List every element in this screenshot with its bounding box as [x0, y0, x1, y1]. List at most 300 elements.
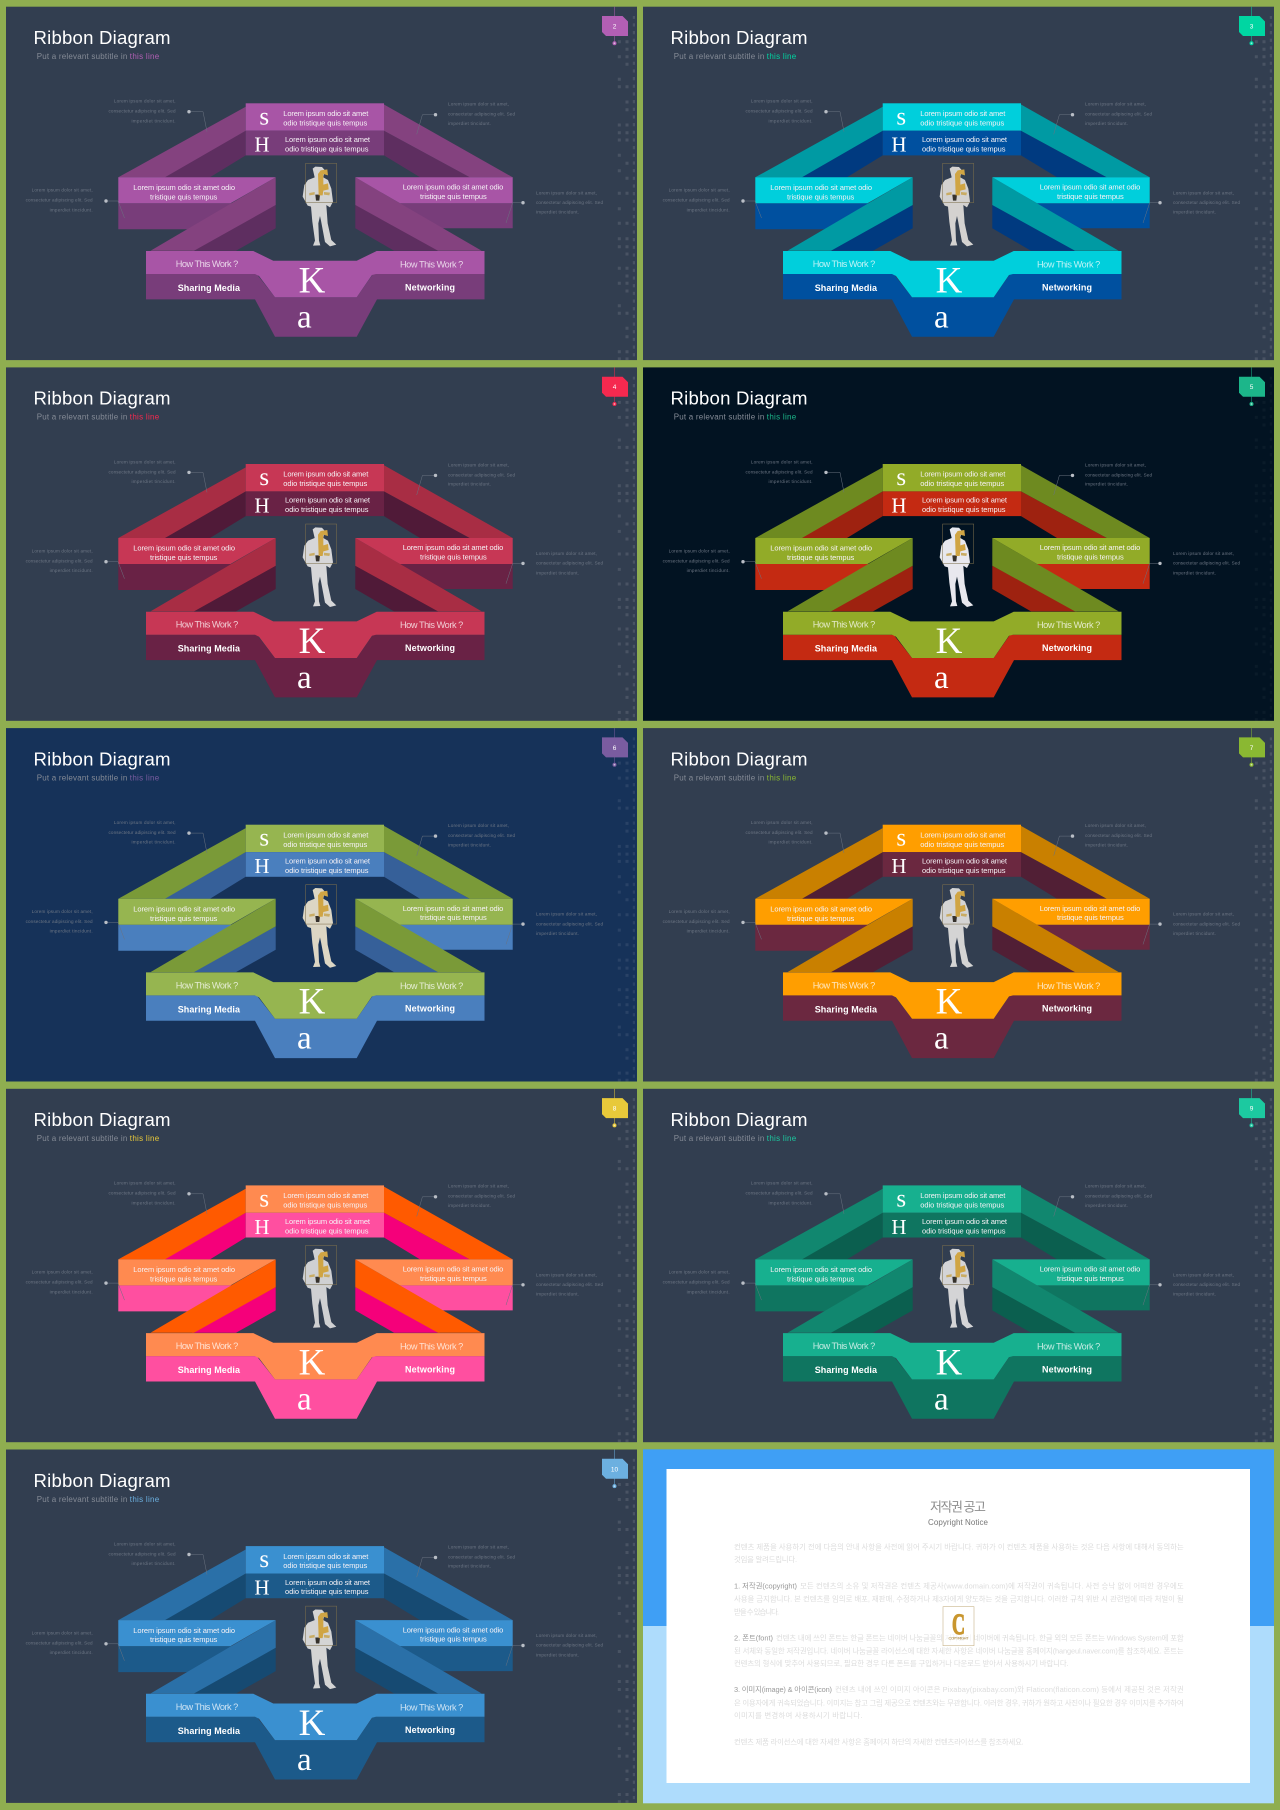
- text: right block: tristique quis tempus: [420, 553, 487, 562]
- presenter figure icon: [303, 885, 337, 968]
- note: top right: [1085, 823, 1152, 847]
- text: left block: Lorem ipsum odio sit amet odio: [770, 183, 872, 192]
- note: middle left: consectetur adipiscing elit. Sed: [663, 1280, 730, 1285]
- note: top left: Lorem ipsum dolor sit amet,: [114, 1181, 176, 1186]
- text: top band: odio tristique quis tempus: [920, 1200, 1005, 1209]
- text: second band: [285, 496, 371, 514]
- paragraph: font: [734, 1634, 1184, 1668]
- subtitle: Put a relevant subtitle in: [37, 52, 127, 61]
- text: left block: tristique quis tempus: [787, 1274, 855, 1283]
- note: middle left: consectetur adipiscing elit. Sed: [663, 919, 730, 924]
- letter a: a: [297, 1381, 312, 1417]
- text: left block: [770, 183, 872, 201]
- presenter figure icon: [303, 163, 337, 246]
- text: right block: [403, 1625, 503, 1644]
- note: middle right: imperdiet tincidunt.: [1173, 931, 1216, 936]
- note: top right: Lorem ipsum dolor sit amet,: [448, 1184, 509, 1189]
- letter K: K: [299, 1342, 326, 1383]
- heading: Ribbon Diagram: [34, 1470, 170, 1491]
- note: top left: imperdiet tincidunt.: [132, 479, 176, 484]
- paragraph: image and icon: 컨텐츠 내에 쓰인 이미지 아이콘은 Pixabay(pixabay.com)와 Flaticon(flaticon.com) 등에서 제공된 것은 저작권: [835, 1685, 1184, 1694]
- text: top band: odio tristique quis tempus: [283, 1561, 368, 1570]
- text: left block: tristique quis tempus: [787, 192, 855, 201]
- note: middle left: consectetur adipiscing elit. Sed: [26, 919, 93, 924]
- note: top right: consectetur adipiscing elit. Sed: [448, 1194, 515, 1199]
- heading: Ribbon Diagram: [670, 748, 808, 769]
- subtitle: this line: [767, 1134, 797, 1143]
- note: middle left: imperdiet tincidunt.: [687, 1289, 730, 1294]
- label: sharing media: Sharing Media: [815, 1365, 878, 1375]
- text: top band: Lorem ipsum odio sit amet: [283, 1552, 369, 1561]
- note: middle right: [1173, 190, 1240, 215]
- note: top left: imperdiet tincidunt.: [132, 118, 176, 123]
- note: top right: imperdiet tincidunt.: [448, 1564, 491, 1569]
- label: how right: How This Work ?: [400, 1702, 463, 1712]
- note: middle right: Lorem ipsum dolor sit amet,: [536, 551, 597, 556]
- text: right block: tristique quis tempus: [1057, 553, 1124, 562]
- label: how right: How This Work ?: [1037, 260, 1100, 270]
- text: top band: Lorem ipsum odio sit amet: [920, 470, 1006, 479]
- letter K: K: [936, 260, 963, 301]
- text: left block: Lorem ipsum odio sit amet odio: [770, 904, 872, 913]
- slide background: [6, 1089, 637, 1442]
- text: top band: Lorem ipsum odio sit amet: [920, 830, 1006, 839]
- heading: Ribbon Diagram: [670, 1109, 808, 1130]
- note: middle right: imperdiet tincidunt.: [536, 570, 579, 575]
- subtitle: Put a relevant subtitle in: [37, 1134, 127, 1143]
- note: middle left: imperdiet tincidunt.: [687, 929, 730, 934]
- note: middle right: [1173, 551, 1240, 575]
- note: top right: imperdiet tincidunt.: [1085, 1203, 1128, 1208]
- subtitle: Put a relevant subtitle in: [674, 1134, 764, 1143]
- note: top right: Lorem ipsum dolor sit amet,: [1085, 823, 1146, 828]
- text: right block: tristique quis tempus: [420, 1635, 487, 1644]
- label: sharing media: Sharing Media: [178, 1004, 241, 1014]
- note: middle left: Lorem ipsum dolor sit amet,: [32, 188, 93, 193]
- label: how left: How This Work ?: [813, 1341, 875, 1351]
- note: middle right: Lorem ipsum dolor sit amet,: [1173, 912, 1234, 917]
- page number badge: [602, 1089, 628, 1127]
- note: top right: [1085, 1184, 1152, 1208]
- page number badge: [1239, 367, 1265, 406]
- page number badge: [1239, 728, 1265, 767]
- subtitle: Put a relevant subtitle in: [37, 1495, 127, 1504]
- text: top band: [283, 830, 369, 849]
- panel: copyright notice: [643, 1449, 1274, 1803]
- text: right block: tristique quis tempus: [420, 192, 487, 201]
- letter s: s: [259, 825, 269, 852]
- text: top band: [920, 109, 1006, 127]
- page number badge: 6: [613, 745, 617, 752]
- page number badge: 10: [611, 1466, 618, 1473]
- note: middle left: [26, 1270, 93, 1294]
- letter s: s: [259, 1546, 269, 1573]
- paragraph: copyright: 받을 수 있습니다.: [734, 1608, 779, 1616]
- note: middle right: imperdiet tincidunt.: [1173, 570, 1216, 575]
- leader lines: [104, 110, 525, 223]
- note: top right: imperdiet tincidunt.: [448, 121, 491, 126]
- text: left block: [133, 904, 235, 923]
- text: right block: Lorem ipsum odio sit amet odio: [403, 904, 503, 913]
- leader lines: [741, 831, 1162, 944]
- ribbon diagram: [118, 825, 513, 1058]
- page number badge: [602, 728, 628, 767]
- note: top right: [448, 823, 515, 847]
- note: middle right: Lorem ipsum dolor sit amet,: [536, 1633, 597, 1638]
- text: second band: Lorem ipsum odio sit amet: [922, 1217, 1008, 1226]
- ribbon diagram: [118, 1546, 513, 1780]
- page number badge: 2: [613, 24, 617, 30]
- note: top left: [746, 820, 813, 845]
- note: top left: imperdiet tincidunt.: [768, 840, 812, 845]
- note: middle left: imperdiet tincidunt.: [687, 207, 730, 212]
- page number badge: 3: [1250, 24, 1254, 30]
- heading: Ribbon Diagram: [34, 388, 170, 409]
- note: middle left: [663, 1270, 730, 1294]
- note: top left: consectetur adipiscing elit. Sed: [108, 830, 176, 835]
- label: sharing media: Sharing Media: [815, 644, 878, 654]
- text: left block: [133, 544, 235, 562]
- panel: slide 6 green and blue on navy: [6, 728, 637, 1082]
- letter a: a: [297, 299, 312, 335]
- slide background: [6, 1450, 637, 1803]
- note: middle left: Lorem ipsum dolor sit amet,: [32, 1270, 93, 1275]
- panel: slide 7 orange and maroon: [643, 728, 1274, 1082]
- paragraph: font: 된 서체와 동일한 저작권입니다. 네이버 나눔글꼴 라이선스에 대한 자세한 사항은 네이버 나눔글꼴 홈페이지(hangeul.naver.com)를 참조하세요. 폰트는: [734, 1646, 1184, 1656]
- text: right block: [1040, 904, 1140, 922]
- text: second band: odio tristique quis tempus: [285, 1226, 369, 1235]
- paragraph: copyright: [734, 1582, 1184, 1616]
- text: second band: [285, 135, 371, 153]
- ribbon diagram: [755, 103, 1150, 337]
- slide background: [643, 367, 1274, 721]
- text: top band: odio tristique quis tempus: [920, 479, 1005, 488]
- note: middle left: [663, 548, 730, 573]
- note: middle right: consectetur adipiscing elit. Sed: [1173, 561, 1240, 566]
- label: sharing media: Sharing Media: [815, 283, 878, 293]
- letter a: a: [934, 1381, 949, 1417]
- note: middle right: imperdiet tincidunt.: [536, 931, 579, 936]
- letter K: K: [299, 1703, 326, 1744]
- paragraph: image and icon: 3. 이미지(image) & 아이콘(icon): [734, 1685, 832, 1694]
- note: top left: [746, 1181, 813, 1205]
- text: left block: Lorem ipsum odio sit amet odio: [133, 904, 235, 913]
- label: sharing media: Sharing Media: [178, 1726, 241, 1736]
- letter H: H: [891, 133, 907, 157]
- note: top right: Lorem ipsum dolor sit amet,: [448, 1544, 509, 1549]
- page number badge: 7: [1250, 745, 1254, 752]
- ribbon diagram: [118, 1185, 513, 1419]
- label: how right: How This Work ?: [1037, 981, 1100, 991]
- note: middle right: imperdiet tincidunt.: [1173, 210, 1216, 215]
- label: how left: How This Work ?: [813, 259, 875, 269]
- text: second band: [922, 1217, 1008, 1236]
- text: second band: odio tristique quis tempus: [922, 505, 1006, 514]
- note: top right: Lorem ipsum dolor sit amet,: [1085, 1184, 1146, 1189]
- note: middle right: [536, 190, 603, 215]
- letter K: K: [299, 260, 326, 301]
- text: top band: Lorem ipsum odio sit amet: [283, 470, 369, 479]
- text: top band: odio tristique quis tempus: [283, 1200, 368, 1209]
- text: left block: tristique quis tempus: [150, 192, 218, 201]
- note: middle right: imperdiet tincidunt.: [536, 210, 579, 215]
- note: top left: imperdiet tincidunt.: [132, 840, 176, 845]
- note: top left: imperdiet tincidunt.: [132, 1561, 176, 1566]
- label: how right: How This Work ?: [400, 260, 463, 270]
- text: top band: Lorem ipsum odio sit amet: [920, 1191, 1006, 1200]
- text: second band: [922, 856, 1008, 875]
- note: top left: [746, 459, 813, 484]
- label: networking: Networking: [1042, 1004, 1092, 1014]
- presenter figure icon: [303, 1245, 337, 1328]
- note: top right: Lorem ipsum dolor sit amet,: [448, 823, 509, 828]
- slide background: [643, 1089, 1274, 1442]
- text: left block: tristique quis tempus: [150, 914, 218, 923]
- text: left block: tristique quis tempus: [150, 1274, 218, 1283]
- label: networking: Networking: [1042, 282, 1092, 292]
- heading: Ribbon Diagram: [34, 27, 170, 48]
- closing line: 컨텐츠 제품 라이선스에 대한 자세한 사항은 홈페이지 하단의 자세한 컨텐츠라이선스를 참조하세요.: [734, 1738, 1024, 1746]
- note: top right: imperdiet tincidunt.: [448, 842, 491, 847]
- subtitle: Put a relevant subtitle in: [674, 413, 764, 422]
- text: top band: Lorem ipsum odio sit amet: [920, 109, 1006, 118]
- panel: slide 5 olive and red on navy: [643, 367, 1274, 721]
- subtitle: Put a relevant subtitle in: [674, 773, 764, 782]
- note: top right: consectetur adipiscing elit. Sed: [1085, 112, 1152, 117]
- note: middle left: consectetur adipiscing elit. Sed: [663, 198, 730, 203]
- note: middle left: Lorem ipsum dolor sit amet,: [669, 1270, 730, 1275]
- text: second band: odio tristique quis tempus: [285, 1587, 369, 1596]
- text: left block: tristique quis tempus: [787, 914, 855, 923]
- note: middle left: Lorem ipsum dolor sit amet,: [669, 188, 730, 193]
- ribbon diagram: [755, 825, 1150, 1058]
- note: top right: imperdiet tincidunt.: [1085, 482, 1128, 487]
- note: top right: consectetur adipiscing elit. Sed: [1085, 833, 1152, 838]
- letter K: K: [936, 621, 963, 662]
- text: right block: [403, 904, 503, 922]
- note: middle left: [663, 188, 730, 212]
- note: top left: imperdiet tincidunt.: [132, 1200, 176, 1205]
- note: top right: Lorem ipsum dolor sit amet,: [448, 462, 509, 467]
- note: middle right: consectetur adipiscing elit. Sed: [1173, 200, 1240, 205]
- label: how left: How This Work ?: [176, 1702, 238, 1712]
- note: top right: [448, 102, 515, 126]
- label: sharing media: Sharing Media: [178, 644, 241, 654]
- page number badge: 4: [613, 384, 617, 391]
- label: sharing media: Sharing Media: [178, 1365, 241, 1375]
- page number badge: [602, 7, 628, 45]
- text: top band: odio tristique quis tempus: [283, 840, 368, 849]
- note: middle left: consectetur adipiscing elit. Sed: [26, 558, 93, 563]
- page number badge: [1239, 1089, 1265, 1127]
- text: second band: Lorem ipsum odio sit amet: [285, 496, 371, 505]
- label: networking: Networking: [405, 282, 455, 292]
- heading: Ribbon Diagram: [34, 1109, 170, 1130]
- label: how right: How This Work ?: [1037, 620, 1100, 630]
- note: top right: Lorem ipsum dolor sit amet,: [448, 102, 509, 107]
- note: top left: Lorem ipsum dolor sit amet,: [114, 459, 176, 464]
- text: top band: [283, 1552, 369, 1570]
- text: right block: Lorem ipsum odio sit amet odio: [1040, 543, 1140, 552]
- logo icon: [943, 1607, 974, 1646]
- note: top right: imperdiet tincidunt.: [1085, 121, 1128, 126]
- label: sharing media: Sharing Media: [815, 1004, 878, 1014]
- text: left block: Lorem ipsum odio sit amet odio: [133, 1626, 235, 1635]
- text: second band: Lorem ipsum odio sit amet: [922, 135, 1008, 144]
- text: left block: Lorem ipsum odio sit amet odio: [770, 1265, 872, 1274]
- white notice card: [666, 1469, 1250, 1783]
- text: left block: [770, 544, 872, 562]
- text: right block: tristique quis tempus: [420, 913, 487, 922]
- letter a: a: [297, 1021, 312, 1057]
- page number badge: [602, 1450, 628, 1488]
- notice title: 저작권 공고: [930, 1500, 986, 1514]
- text: right block: [403, 1265, 503, 1283]
- letter s: s: [259, 1185, 269, 1212]
- letter H: H: [254, 1215, 270, 1239]
- subtitle: this line: [767, 773, 797, 782]
- leader lines: [104, 831, 525, 944]
- slide background: [643, 728, 1274, 1082]
- letter s: s: [259, 103, 269, 130]
- note: top left: Lorem ipsum dolor sit amet,: [751, 820, 812, 825]
- presenter figure icon: [940, 1245, 974, 1328]
- panel: slide 2 purple: [6, 7, 637, 360]
- note: top right: Lorem ipsum dolor sit amet,: [1085, 462, 1146, 467]
- label: how left: How This Work ?: [176, 980, 238, 990]
- note: top left: consectetur adipiscing elit. Sed: [746, 830, 813, 835]
- ribbon diagram: [755, 464, 1150, 697]
- note: top right: imperdiet tincidunt.: [448, 1203, 491, 1208]
- subtitle: this line: [130, 1134, 160, 1143]
- text: left block: [770, 904, 872, 923]
- paragraph: copyright: 사용을 금지합니다. 본 컨텐츠를 임의로 배포, 재판매, 수정하거나 제3자에게 양도하는 것을 금지합니다. 이러한 규칙 위반 시 관련법에 따라 처벌이 될: [734, 1594, 1184, 1604]
- leader lines: [104, 1192, 525, 1305]
- text: top band: [920, 1191, 1006, 1210]
- note: middle right: [1173, 912, 1240, 936]
- note: top right: Lorem ipsum dolor sit amet,: [1085, 102, 1146, 107]
- note: top left: [108, 99, 176, 123]
- intro paragraph: 컨텐츠 제품을 사용하기 전에 다음의 안내 사항을 사전에 읽어 주시기 바랍니다. 귀하가 이 컨텐츠 제품을 사용하는 것은 다음 사항에 대해서 동의하는: [734, 1542, 1184, 1552]
- text: right block: [1040, 543, 1140, 562]
- letter K: K: [299, 982, 326, 1023]
- text: left block: tristique quis tempus: [150, 553, 218, 562]
- notice subtitle: Copyright Notice: [928, 1518, 989, 1527]
- note: middle right: Lorem ipsum dolor sit amet,: [1173, 1272, 1234, 1277]
- note: top right: [1085, 102, 1152, 126]
- note: top right: imperdiet tincidunt.: [1085, 842, 1128, 847]
- note: top left: Lorem ipsum dolor sit amet,: [114, 820, 176, 825]
- note: middle left: consectetur adipiscing elit. Sed: [26, 1280, 93, 1285]
- subtitle: this line: [130, 773, 160, 782]
- note: top right: imperdiet tincidunt.: [448, 482, 491, 487]
- note: middle right: consectetur adipiscing elit. Sed: [1173, 921, 1240, 926]
- note: middle right: consectetur adipiscing elit. Sed: [536, 561, 603, 566]
- note: middle right: imperdiet tincidunt.: [536, 1292, 579, 1297]
- note: top left: consectetur adipiscing elit. Sed: [108, 109, 176, 114]
- note: middle right: [536, 551, 603, 575]
- note: middle left: Lorem ipsum dolor sit amet,: [669, 909, 730, 914]
- note: middle right: Lorem ipsum dolor sit amet,: [1173, 190, 1234, 195]
- note: middle right: [536, 1272, 603, 1297]
- light blue lower background: [643, 1626, 1274, 1803]
- panel: slide 4 crimson: [6, 367, 637, 721]
- note: top left: Lorem ipsum dolor sit amet,: [751, 1181, 812, 1186]
- subtitle: this line: [767, 413, 797, 422]
- note: top left: Lorem ipsum dolor sit amet,: [751, 459, 812, 464]
- note: middle right: imperdiet tincidunt.: [536, 1652, 579, 1657]
- text: second band: odio tristique quis tempus: [285, 866, 369, 875]
- text: left block: [133, 1626, 235, 1644]
- letter s: s: [896, 1185, 906, 1212]
- text: left block: tristique quis tempus: [150, 1635, 218, 1644]
- note: top right: [448, 1544, 515, 1569]
- note: middle right: [1173, 1272, 1240, 1297]
- note: middle left: Lorem ipsum dolor sit amet,: [32, 909, 93, 914]
- text: top band: Lorem ipsum odio sit amet: [283, 109, 369, 118]
- label: networking: Networking: [405, 1364, 455, 1374]
- subtitle: Put a relevant subtitle in: [37, 413, 127, 422]
- intro paragraph: 것임을 알려드립니다.: [734, 1555, 797, 1564]
- text: top band: odio tristique quis tempus: [920, 118, 1005, 127]
- slide background: [6, 7, 637, 360]
- label: sharing media: Sharing Media: [178, 283, 241, 293]
- note: middle left: imperdiet tincidunt.: [50, 1650, 93, 1655]
- letter H: H: [254, 133, 270, 157]
- note: middle left: Lorem ipsum dolor sit amet,: [669, 548, 730, 553]
- text: right block: tristique quis tempus: [420, 1274, 487, 1283]
- label: networking: Networking: [405, 1004, 455, 1014]
- blue upper background: [643, 1449, 1274, 1626]
- label: networking: Networking: [1042, 1364, 1092, 1374]
- label: networking: Networking: [405, 1725, 455, 1735]
- note: middle left: imperdiet tincidunt.: [50, 207, 93, 212]
- letter s: s: [896, 825, 906, 852]
- ribbon diagram: [118, 103, 513, 337]
- letter s: s: [259, 464, 269, 491]
- letter s: s: [896, 103, 906, 130]
- text: left block: tristique quis tempus: [787, 553, 855, 562]
- note: top left: Lorem ipsum dolor sit amet,: [114, 1541, 176, 1546]
- logo icon: COPYRIGHT: [948, 1636, 969, 1640]
- text: right block: [1040, 1265, 1140, 1283]
- paragraph: copyright: 모든 컨텐츠의 소유 및 저작권은 컨텐츠 제공사(www.domain.com)에 저작권이 귀속됩니다. 사전 승낙 없이 어떠한 경우에도: [800, 1582, 1184, 1590]
- text: top band: odio tristique quis tempus: [283, 118, 368, 127]
- leader lines: [741, 110, 1162, 223]
- text: right block: tristique quis tempus: [1057, 192, 1124, 201]
- letter H: H: [891, 493, 907, 517]
- note: middle right: consectetur adipiscing elit. Sed: [536, 200, 603, 205]
- logo icon: C: [952, 1608, 965, 1641]
- letter a: a: [934, 660, 949, 696]
- note: middle left: [26, 909, 93, 934]
- label: how right: How This Work ?: [400, 1342, 463, 1352]
- text: second band: odio tristique quis tempus: [285, 144, 369, 153]
- page number badge: 8: [613, 1106, 617, 1113]
- text: right block: Lorem ipsum odio sit amet odio: [403, 543, 503, 552]
- note: top left: Lorem ipsum dolor sit amet,: [114, 99, 176, 104]
- text: second band: Lorem ipsum odio sit amet: [922, 496, 1008, 505]
- note: top left: consectetur adipiscing elit. Sed: [108, 1191, 176, 1196]
- text: right block: Lorem ipsum odio sit amet odio: [1040, 182, 1140, 192]
- text: top band: [283, 109, 369, 127]
- label: networking: Networking: [1042, 643, 1092, 653]
- paragraph: image and icon: 이미지를 변경하여 사용하시기 바랍니다.: [734, 1711, 862, 1720]
- label: networking: Networking: [405, 643, 455, 653]
- slide background: [6, 367, 637, 721]
- note: top right: [448, 1184, 515, 1208]
- text: second band: [922, 496, 1008, 514]
